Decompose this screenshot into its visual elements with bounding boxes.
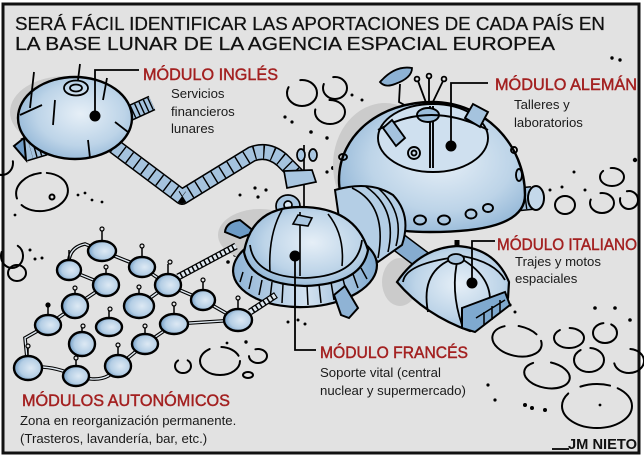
- moon rocks: [14, 56, 637, 412]
- text: módulo francés: nuclear y supermercado): [320, 383, 466, 398]
- text: módulo italiano: espaciales: [515, 271, 578, 286]
- antenna and panel: [276, 145, 317, 222]
- ribbed connector between German and French modules: [335, 186, 405, 262]
- text: módulo alemán: laboratorios: [514, 115, 583, 130]
- right nozzle: [512, 198, 532, 200]
- lattice links to French module: [178, 246, 276, 312]
- text: módulo alemán: Talleres y: [514, 97, 570, 112]
- text: módulo francés: Soporte vital (central: [320, 365, 441, 380]
- text: módulo italiano: [515, 254, 601, 286]
- side nozzles: [24, 103, 152, 150]
- text: módulos autonómicos: Zona en reorganización permanente.: [20, 413, 236, 428]
- text: módulo inglés: Servicios: [171, 86, 225, 101]
- módulo francés: [225, 145, 379, 350]
- text: módulo francés: [320, 365, 466, 398]
- links: [25, 244, 238, 379]
- text: módulos autonómicos: [20, 413, 236, 446]
- title: LA BASE LUNAR DE LA AGENCIA ESPACIAL EUROPEA: [15, 33, 556, 54]
- title: [15, 13, 605, 54]
- nozzle: [225, 220, 255, 238]
- text: módulo inglés: lunares: [171, 121, 215, 136]
- label: módulo alemán: MÓDULO ALEMÁN: [495, 75, 637, 94]
- signature: JM NIETO: [568, 436, 637, 453]
- connecting tube between English and French modules: [114, 146, 300, 197]
- módulo inglés: [14, 64, 152, 160]
- moon craters: [0, 77, 644, 428]
- tube between German and Italian modules: [385, 232, 425, 262]
- text: módulo inglés: [171, 86, 235, 136]
- módulo alemán: [339, 68, 544, 232]
- module shadows: [10, 76, 437, 306]
- leg: [334, 286, 358, 318]
- text: módulos autonómicos: (Trasteros, lavandería, bar, etc.): [20, 431, 207, 446]
- label: módulo francés: MÓDULO FRANCÉS: [320, 343, 468, 362]
- pods: [14, 241, 252, 386]
- label: módulos autonómicos: MÓDULOS AUTONÓMICOS: [22, 391, 230, 410]
- label: módulo inglés: MÓDULO INGLÉS: [143, 65, 278, 84]
- dish and antennas: [380, 68, 446, 108]
- text: módulo alemán: [514, 97, 583, 130]
- módulo italiano: [397, 240, 510, 332]
- title: SERÁ FÁCIL IDENTIFICAR LAS APORTACIONES DE CADA PAÍS EN: [15, 13, 605, 34]
- módulos autonómicos network: [14, 227, 276, 386]
- antennas: [28, 231, 238, 366]
- text: módulo inglés: financieros: [171, 104, 235, 119]
- text: módulo italiano: Trajes y motos: [515, 254, 601, 269]
